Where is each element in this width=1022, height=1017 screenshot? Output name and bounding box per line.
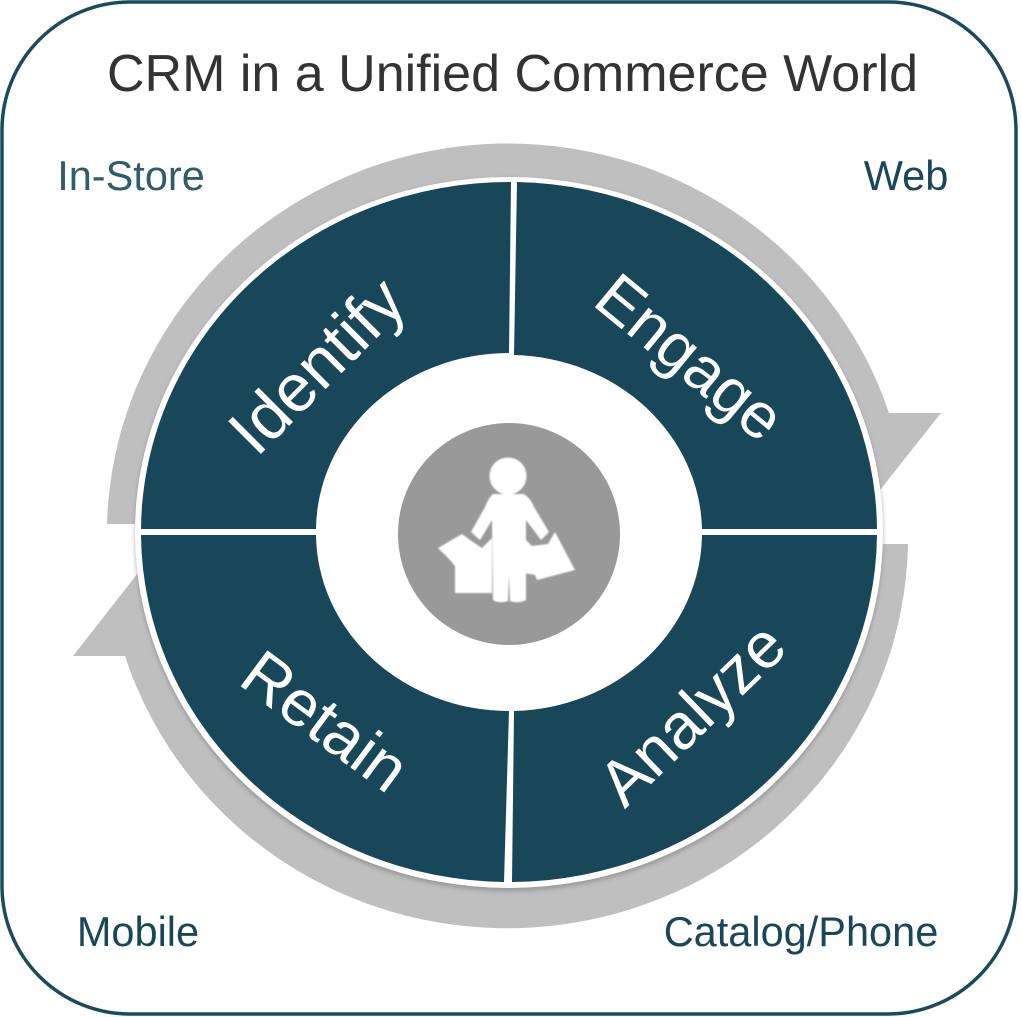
segment: Engage: Engage bbox=[582, 259, 798, 455]
label: In-Store: In-Store bbox=[57, 152, 205, 199]
segment: Analyze: Analyze bbox=[584, 608, 800, 820]
wheel shadow bbox=[135, 179, 883, 891]
segment: Retain bbox=[141, 535, 509, 882]
title: CRM in a Unified Commerce World bbox=[107, 45, 918, 103]
arrow: top cycle arrow bbox=[107, 144, 941, 524]
label: Web: Web bbox=[864, 152, 948, 199]
icon: shopper bbox=[398, 423, 620, 645]
segment: Identify: Identify bbox=[214, 263, 420, 469]
segment: Identify bbox=[141, 182, 511, 529]
label: Mobile: Mobile bbox=[77, 908, 199, 955]
arrow: bottom cycle arrow bbox=[73, 544, 908, 928]
label: Catalog/Phone: Catalog/Phone bbox=[664, 908, 938, 955]
segment: Analyze bbox=[512, 535, 877, 882]
segment: Retain: Retain bbox=[228, 636, 423, 806]
wheel white rim bbox=[135, 177, 883, 888]
segment: Engage bbox=[514, 182, 877, 529]
